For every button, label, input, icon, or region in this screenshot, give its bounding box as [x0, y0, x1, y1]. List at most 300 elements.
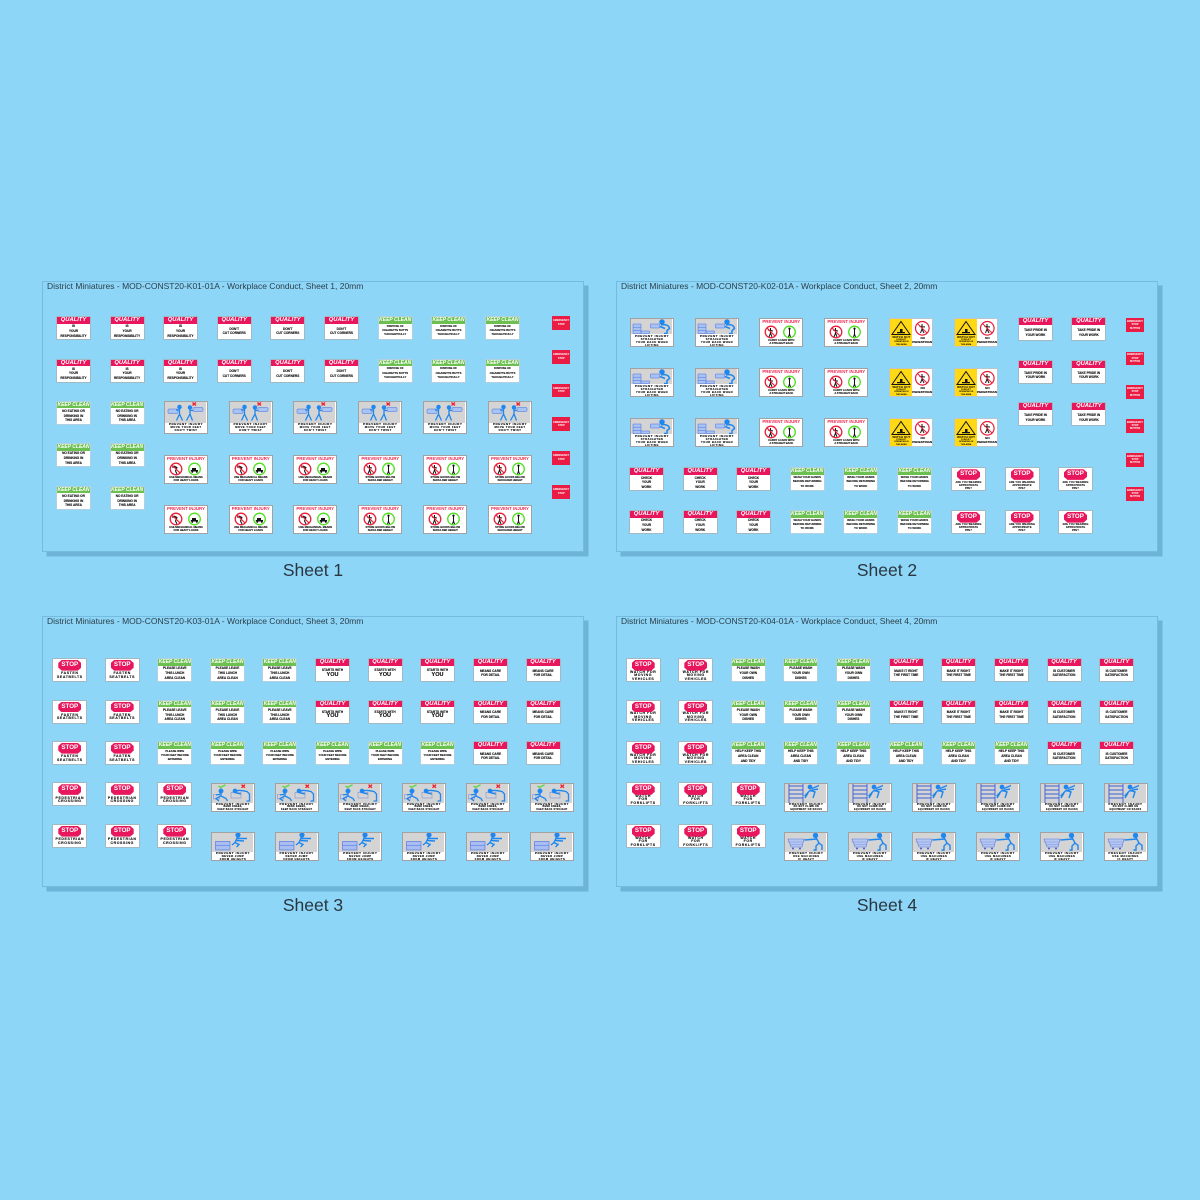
keep clean sign: HELP KEEP THIS [893, 749, 919, 753]
prevent injury sign: climbing: PREVENT INJURY [917, 802, 951, 806]
prevent injury sign: jumping: FROM HEIGHTS [539, 858, 565, 861]
stop sign: FASTEN [61, 754, 78, 758]
prevent injury sign: jumping [466, 832, 510, 861]
stop sign: STOP [61, 827, 78, 834]
watch out sign [889, 318, 933, 347]
keep clean sign: KEEP CLEAN [837, 701, 870, 707]
prevent injury sign: feet: DON'T TWIST [434, 429, 457, 432]
stop sign: STOP [635, 827, 652, 834]
keep clean sign: KEEP CLEAN [159, 701, 191, 707]
quality sign: QUALITY [1023, 318, 1048, 324]
keep clean sign: KEEP CLEAN [379, 317, 411, 323]
prevent injury sign: mechanical: FOR HEAVY LOADS [303, 479, 328, 482]
keep clean sign: NO EATING OR [116, 494, 138, 498]
prevent injury sign: machines: USE MACHINES [857, 855, 883, 858]
prevent injury sign: jumping: NEVER JUMP [349, 855, 372, 858]
watch out sign: WATCH OUT [892, 335, 910, 339]
stop sign: STOP [740, 827, 757, 834]
keep clean sign: KEEP CLEAN [942, 742, 975, 748]
keep clean sign: YOUR OWN [739, 671, 757, 675]
keep clean sign [421, 742, 454, 764]
keep clean sign: DRINKING IN [117, 414, 137, 418]
quality sign [890, 701, 923, 723]
prevent injury sign: machines: IF HEAVY [798, 858, 814, 861]
keep clean sign: ENTERING [378, 758, 392, 761]
keep clean sign: NO EATING OR [116, 451, 138, 455]
keep clean sign: YOUR FEET BEFORE [161, 754, 189, 757]
quality sign: DON'T [229, 369, 239, 373]
prevent injury sign: climbing: PREVENT INJURY [1108, 802, 1143, 806]
prevent injury sign: mechanical: FOR HEAVY LOADS [238, 529, 263, 532]
keep clean sign: KEEP CLEAN [890, 742, 922, 748]
prevent injury sign: bend knees [211, 783, 255, 812]
prevent injury sign: mechanical: FOR HEAVY LOADS [238, 479, 263, 482]
keep clean sign: KEEP CLEAN [837, 659, 870, 665]
stop sign: STOP [166, 827, 183, 834]
emergency stop label: EMERGENCY [553, 319, 569, 322]
prevent injury sign: climbing: DO NOT CLIMB ON [985, 806, 1011, 808]
emergency stop label: EMERGENCY [553, 454, 569, 457]
stop sign: FOR [691, 797, 700, 801]
keep clean sign: YOUR FEET BEFORE [371, 754, 399, 757]
prevent injury sign: bend knees: PREVENT INJURY [343, 802, 377, 806]
prevent injury sign: bend knees: BEND KNEES, [224, 806, 242, 808]
quality sign [474, 742, 507, 764]
emergency stop label [1126, 487, 1144, 500]
stop sign: FOR [639, 797, 648, 801]
keep clean sign: THIS LUNCH [165, 671, 184, 675]
keep clean sign: TO WORK [801, 485, 814, 488]
prevent injury sign: lifting: YOUR BACK WHEN [701, 341, 733, 344]
prevent injury sign: feet: DON'T TWIST [499, 429, 521, 432]
panel: sheet 2 [616, 281, 1158, 552]
keep clean sign: KEEP CLEAN [264, 701, 296, 707]
keep clean sign: KEEP CLEAN [111, 444, 143, 450]
prevent injury sign: storage [488, 455, 532, 484]
prevent injury sign: carry: PREVENT INJURY [762, 369, 800, 374]
prevent injury sign: feet: PREVENT INJURY [428, 422, 462, 426]
prevent injury sign: lifting: YOUR BACK WHEN [701, 441, 733, 444]
prevent injury sign: feet: PREVENT INJURY [493, 422, 527, 426]
prevent injury sign: feet: MOVE YOUR FEET [235, 426, 266, 429]
prevent injury sign: storage [358, 505, 402, 534]
emergency stop label: STOP [1132, 424, 1138, 427]
stop sign: STOP [166, 785, 183, 792]
keep clean sign: KEEP CLEAN [432, 360, 465, 366]
keep clean sign: DISPOSE OF [440, 325, 457, 328]
quality sign: QUALITY [687, 511, 713, 517]
quality sign [526, 701, 560, 723]
keep clean sign: AND TIDY [951, 759, 966, 763]
prevent injury sign: climbing: DO NOT CLIMB ON [857, 806, 883, 808]
quality sign: IS [72, 367, 75, 371]
quality sign [630, 468, 663, 490]
prevent injury sign: carry: PREVENT INJURY [827, 369, 865, 374]
quality sign: QUALITY [168, 360, 193, 366]
stop sign: WATCH FOR [683, 753, 709, 757]
keep clean sign: KEEP CLEAN [211, 742, 244, 748]
stop sign: STOP [1067, 513, 1084, 520]
quality sign: WORK [695, 528, 705, 532]
stop sign: MOVING [634, 715, 652, 719]
stop sign [1059, 468, 1092, 490]
quality sign: WORK [695, 485, 705, 489]
keep clean sign: AREA CLEAN [1001, 754, 1022, 758]
prevent injury sign: bend knees: PREVENT INJURY [407, 802, 441, 806]
quality sign [995, 701, 1028, 723]
prevent injury sign: jumping [211, 832, 255, 861]
keep clean sign: HELP KEEP THIS [946, 749, 971, 753]
quality sign: QUALITY [221, 317, 247, 323]
prevent injury sign: carry: A STRAIGHT BACK [769, 392, 793, 395]
stop sign: PEDESTRIAN [108, 837, 136, 841]
prevent injury sign: lifting: YOUR BACK WHEN [636, 391, 668, 394]
quality sign: RESPONSIBILITY [60, 334, 87, 338]
quality sign: RESPONSIBILITY [167, 376, 194, 380]
keep clean sign: PLEASE LEAVE [216, 708, 239, 712]
caption: sheet 4: Sheet 4 [857, 895, 917, 915]
stop sign: VEHICLES [685, 676, 707, 680]
sheet 3 title: District Miniatures - MOD-CONST20-K03-01A - Workplace Conduct, Sheet 3, 20mm [47, 616, 363, 626]
prevent injury sign: bend knees: BEND KNEES, [478, 806, 498, 808]
stop sign: APPROPRIATE [959, 526, 978, 529]
quality sign: MAKE IT RIGHT [1000, 710, 1023, 714]
keep clean sign [732, 742, 765, 764]
prevent injury sign: mechanical: PREVENT INJURY [296, 506, 334, 511]
keep clean sign: HELP KEEP THIS [841, 749, 866, 753]
prevent injury sign: bend knees: BEND KNEES, [351, 806, 370, 808]
keep clean sign: CIGARETTE BUTTS [382, 329, 408, 332]
stop sign: APPROPRIATE [1012, 526, 1032, 529]
quality sign: QUALITY [1104, 701, 1129, 707]
keep clean sign: KEEP CLEAN [995, 742, 1028, 748]
quality sign: YOUR WORK [1026, 375, 1045, 379]
keep clean sign: YOUR OWN [792, 671, 810, 675]
stop sign: SEATBELTS [109, 758, 135, 762]
prevent injury sign: feet: MOVE YOUR FEET [365, 426, 396, 429]
keep clean sign: DRINKING IN [64, 499, 83, 503]
stop sign: STOP [687, 661, 704, 668]
stop sign: STOP [635, 785, 652, 792]
quality sign: YOU [432, 713, 443, 719]
prevent injury sign: jumping: NEVER JUMP [222, 855, 244, 858]
keep clean sign: DISHES [848, 676, 859, 680]
prevent injury sign: bend knees: BEND KNEES, [287, 806, 306, 808]
stop sign: STOP [114, 703, 131, 710]
watch out sign: THIS AREA [896, 344, 907, 346]
quality sign: QUALITY [478, 701, 503, 707]
prevent injury sign: storage: STORE GOODS BELOW [365, 526, 395, 529]
quality sign: STARTS WITH [427, 668, 448, 672]
prevent injury sign: storage: PREVENT INJURY [491, 506, 529, 511]
quality sign: IS CUSTOMER [1106, 752, 1127, 756]
stop sign: APPROPRIATE [959, 484, 978, 487]
stop sign: FOR [691, 839, 700, 843]
stop sign [53, 783, 86, 805]
keep clean sign: THIS AREA [65, 503, 82, 507]
watch out sign [954, 318, 998, 347]
emergency stop label: EMERGENCY [1127, 353, 1143, 356]
quality sign: YOUR [642, 523, 651, 527]
quality sign: MEANS CARE [480, 710, 501, 714]
quality sign: QUALITY [275, 360, 301, 366]
prevent injury sign: mechanical: USE MECHANICAL MEANS [299, 526, 332, 529]
keep clean sign: PLEASE WASH [842, 666, 865, 670]
prevent injury sign: storage [358, 455, 402, 484]
keep clean sign: KEEP CLEAN [379, 360, 411, 366]
prevent injury sign: lifting [630, 368, 674, 397]
prevent injury sign: bend knees: KEEP BACK STRAIGHT [217, 809, 249, 811]
prevent injury sign: storage: STORE GOODS BELOW [495, 476, 525, 479]
quality sign: YOUR [123, 329, 132, 333]
prevent injury sign: machines [784, 832, 828, 861]
keep clean sign: BEFORE RETURNING [793, 480, 821, 483]
quality sign: YOUR WORK [1079, 375, 1099, 379]
keep clean sign [111, 402, 144, 424]
prevent injury sign: jumping: FROM HEIGHTS [347, 858, 374, 861]
quality sign [164, 317, 197, 339]
keep clean sign: KEEP CLEAN [57, 487, 90, 493]
prevent injury sign: feet: PREVENT INJURY [363, 422, 397, 426]
quality sign [1048, 742, 1080, 764]
prevent injury sign: lifting: PREVENT INJURY [635, 334, 669, 338]
quality sign [325, 360, 358, 382]
quality sign: RESPONSIBILITY [167, 334, 194, 338]
stop sign: VEHICLES [685, 718, 707, 722]
prevent injury sign: climbing: EQUIPMENT OR RACKS [790, 809, 822, 811]
prevent injury sign: carry: CARRY LOADS WITH [768, 439, 794, 442]
prevent injury sign: lifting: PREVENT INJURY [700, 434, 734, 438]
keep clean sign: AREA CLEAN [948, 754, 969, 758]
prevent injury sign: mechanical [229, 505, 273, 534]
prevent injury sign: lifting: STRAIGHTEN [706, 388, 728, 391]
quality sign: YOUR [123, 371, 132, 375]
stop sign: WATCH FOR [630, 670, 656, 674]
quality sign: QUALITY [320, 659, 345, 665]
quality sign: FOR DETAIL [534, 715, 552, 719]
keep clean sign: KEEP CLEAN [845, 511, 877, 517]
prevent injury sign: bend knees [466, 783, 510, 812]
keep clean sign: NO EATING OR [62, 409, 85, 413]
keep clean sign: YOUR FEET BEFORE [214, 754, 241, 757]
stop sign: VEHICLES [632, 676, 654, 680]
keep clean sign: THOUGHTFULLY [437, 376, 460, 379]
keep clean sign [486, 317, 519, 339]
keep clean sign: WASH YOUR HANDS [793, 476, 821, 479]
prevent injury sign: machines: IF HEAVY [1117, 858, 1134, 861]
prevent injury sign: lifting: LIFTING [645, 394, 659, 397]
quality sign: CUT CORNERS [330, 374, 353, 378]
prevent injury sign: lifting: PREVENT INJURY [635, 434, 669, 438]
keep clean sign: KEEP CLEAN [369, 742, 401, 748]
prevent injury sign: climbing [1040, 783, 1084, 812]
stop sign: STOP [61, 785, 78, 792]
stop sign: STOP [1014, 470, 1030, 477]
quality sign: SATISFACTION [1105, 673, 1128, 677]
caption: sheet 3: Sheet 3 [283, 895, 343, 915]
quality sign: WORK [642, 528, 651, 532]
prevent injury sign: mechanical [293, 505, 337, 534]
keep clean sign: DRINKING IN [117, 499, 137, 503]
keep clean sign: ENTERING [273, 758, 287, 761]
prevent injury sign: feet: DON'T TWIST [239, 429, 262, 432]
keep clean sign: PLEASE WIPE [376, 750, 394, 753]
keep clean sign: THIS AREA [65, 461, 82, 465]
quality sign [942, 659, 975, 681]
stop sign [53, 742, 86, 764]
keep clean sign: DRINKING IN [117, 456, 137, 460]
quality sign: QUALITY [530, 701, 556, 707]
stop sign: STOP [740, 785, 757, 792]
emergency stop label [552, 350, 570, 364]
stop sign: WATCH [688, 836, 704, 840]
quality sign [111, 360, 144, 382]
prevent injury sign: carry: PREVENT INJURY [827, 319, 865, 324]
quality sign: QUALITY [741, 511, 766, 517]
quality sign [316, 659, 349, 681]
keep clean sign: CIGARETTE BUTTS [490, 329, 515, 332]
prevent injury sign: jumping: PREVENT INJURY [343, 851, 377, 855]
keep clean sign: KEEP CLEAN [785, 742, 817, 748]
prevent injury sign: storage: SHOULDER HEIGHT [433, 529, 458, 532]
prevent injury sign: mechanical: PREVENT INJURY [296, 456, 334, 461]
stop sign [952, 511, 985, 533]
prevent injury sign: climbing: PREVENT INJURY [981, 802, 1015, 806]
keep clean sign: KEEP CLEAN [264, 742, 296, 748]
quality sign: RESPONSIBILITY [60, 376, 87, 380]
prevent injury sign: lifting: LIFTING [645, 344, 659, 347]
stop sign: STOP [61, 744, 78, 751]
quality sign: CUT CORNERS [223, 331, 246, 335]
stop sign: SEATBELTS [57, 758, 83, 762]
prevent injury sign: climbing: PREVENT INJURY [789, 802, 823, 806]
watch out sign: THIS AREA [961, 444, 971, 446]
quality sign: SATISFACTION [1053, 673, 1075, 677]
prevent injury sign: jumping: NEVER JUMP [541, 855, 563, 858]
stop sign [627, 783, 660, 805]
prevent injury sign: jumping: PREVENT INJURY [216, 851, 250, 855]
keep clean sign: THIS LUNCH [165, 713, 184, 717]
prevent injury sign: carry [759, 318, 803, 347]
quality sign [526, 659, 560, 681]
keep clean sign: HELP KEEP THIS [735, 749, 761, 753]
prevent injury sign: lifting: LIFTING [710, 444, 724, 447]
quality sign [942, 701, 975, 723]
keep clean sign: KEEP CLEAN [732, 742, 764, 748]
prevent injury sign: bend knees: PREVENT INJURY [471, 802, 505, 806]
quality sign: YOU [432, 672, 443, 678]
prevent injury sign: lifting: YOUR BACK WHEN [701, 391, 733, 394]
emergency stop label: EMERGENCY [553, 387, 569, 390]
keep clean sign [784, 659, 817, 681]
prevent injury sign: jumping [338, 832, 382, 861]
prevent injury sign: mechanical [164, 505, 208, 534]
quality sign [630, 511, 663, 533]
stop sign [679, 783, 712, 805]
keep clean sign: ENTERING [430, 758, 445, 761]
quality sign [316, 701, 349, 723]
stop sign: STOP [61, 661, 78, 668]
prevent injury sign: bend knees [402, 783, 446, 812]
quality sign [368, 701, 402, 723]
prevent injury sign: bend knees: KEEP BACK STRAIGHT [536, 809, 568, 811]
watch out sign: WATCH OUT [957, 335, 975, 339]
quality sign: MAKE IT RIGHT [894, 710, 918, 714]
stop sign: FORKLIFTS [631, 842, 656, 846]
prevent injury sign: storage: SHOULDER HEIGHT [368, 479, 393, 482]
quality sign: CHECK [748, 518, 759, 522]
quality sign: QUALITY [1051, 742, 1077, 748]
keep clean sign: PLEASE LEAVE [268, 666, 292, 670]
stop sign: ARE YOU WEARING [1009, 481, 1035, 484]
prevent injury sign: feet: DON'T TWIST [369, 429, 392, 432]
quality sign [737, 468, 770, 490]
prevent injury sign: feet: PREVENT INJURY [298, 422, 332, 426]
keep clean sign: PLEASE WIPE [428, 750, 447, 753]
stop sign: WATCH FOR [683, 670, 709, 674]
keep clean sign: PLEASE WIPE [270, 750, 289, 753]
quality sign: MAKE IT RIGHT [947, 710, 970, 714]
quality sign [421, 701, 454, 723]
keep clean sign: TO WORK [908, 527, 921, 530]
emergency stop label: BUTTON [1130, 427, 1140, 430]
keep clean sign: DISHES [795, 717, 807, 721]
quality sign: QUALITY [1076, 403, 1102, 409]
quality sign [271, 317, 304, 339]
watch out sign: WATCH OUT [892, 435, 910, 439]
quality sign: SATISFACTION [1105, 715, 1128, 719]
quality sign: IS CUSTOMER [1106, 669, 1127, 673]
quality sign: QUALITY [221, 360, 247, 366]
quality sign: QUALITY [168, 317, 193, 323]
keep clean sign: HELP KEEP THIS [999, 749, 1024, 753]
prevent injury sign: machines [976, 832, 1020, 861]
emergency stop label [1126, 385, 1144, 399]
emergency stop label [1126, 318, 1144, 332]
keep clean sign: KEEP CLEAN [898, 468, 931, 474]
stop sign [106, 659, 139, 681]
watch out sign: NO [920, 336, 925, 340]
stop sign: PPE? [965, 529, 972, 532]
stop sign: PEDESTRIAN [161, 837, 189, 841]
keep clean sign: KEEP CLEAN [791, 511, 823, 517]
quality sign: TAKE PRIDE IN [1077, 371, 1100, 375]
emergency stop label: STOP [1132, 323, 1138, 326]
keep clean sign: WASH YOUR HANDS [901, 476, 928, 479]
keep clean sign: THIS AREA [119, 461, 136, 465]
keep clean sign: YOUR OWN [739, 713, 757, 717]
emergency stop label: EMERGENCY [1127, 489, 1143, 492]
prevent injury sign: machines: USE MACHINES [1112, 855, 1139, 858]
prevent injury sign: climbing: EQUIPMENT OR RACKS [854, 809, 886, 811]
quality sign: CHECK [695, 518, 706, 522]
emergency stop label [1126, 453, 1144, 466]
keep clean sign: DRINKING IN [64, 414, 83, 418]
quality sign: STARTS WITH [374, 710, 396, 714]
quality sign: IS CUSTOMER [1053, 710, 1075, 714]
watch out sign: WATCH OUT [892, 385, 910, 389]
quality sign [111, 317, 144, 339]
quality sign: SATISFACTION [1105, 756, 1128, 760]
keep clean sign: BEFORE RETURNING [846, 480, 875, 483]
prevent injury sign: jumping [530, 832, 574, 861]
quality sign [474, 659, 507, 681]
emergency stop label: EMERGENCY [553, 421, 569, 424]
prevent injury sign: jumping: FROM HEIGHTS [283, 858, 310, 861]
prevent injury sign: feet [293, 401, 337, 434]
keep clean sign: CIGARETTE BUTTS [436, 372, 461, 375]
quality sign: CHECK [748, 476, 759, 480]
